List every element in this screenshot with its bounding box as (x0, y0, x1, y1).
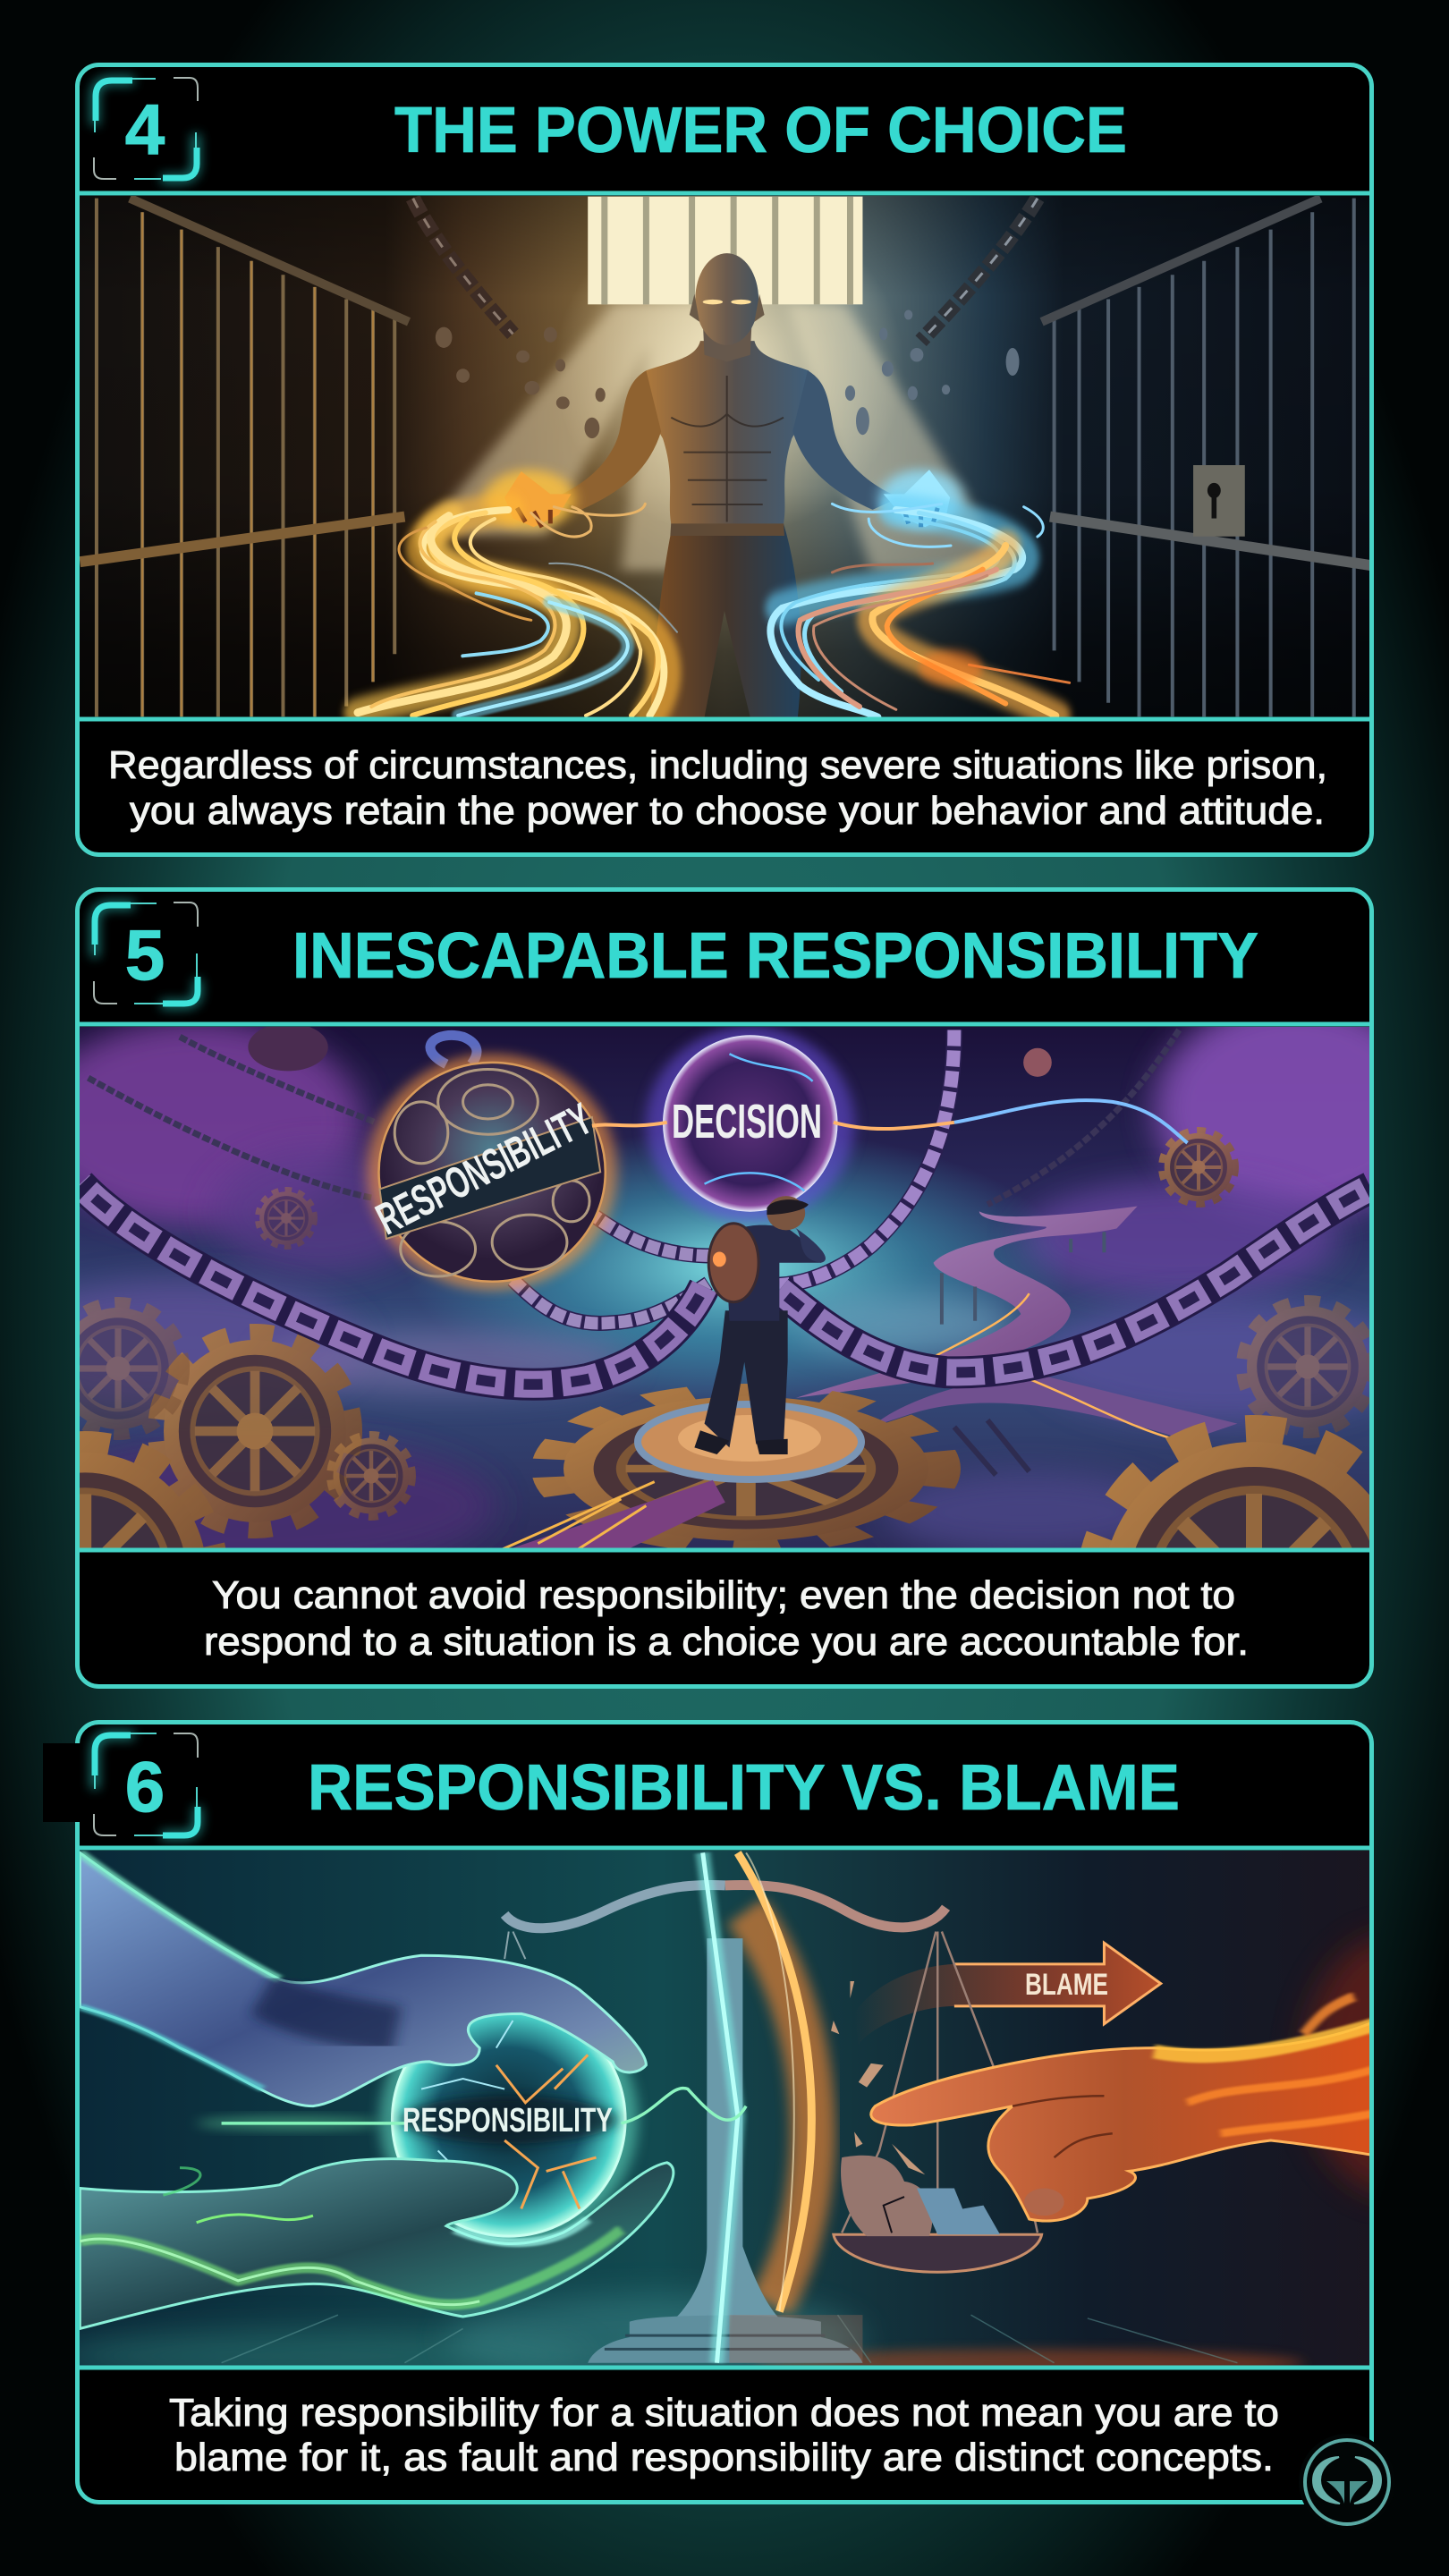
orange arc glow (746, 1911, 813, 2305)
gears (0, 1131, 1411, 1751)
orb label: DECISION (672, 1095, 822, 1148)
body text: you always retain the power to choose your behavior and attitude. (130, 789, 1325, 833)
chains (80, 1030, 1370, 1385)
post and base (675, 1938, 779, 2318)
lock (1193, 465, 1245, 537)
upper hand (80, 1852, 646, 2106)
body text (204, 1573, 1249, 1664)
illustration: hands holding orb against pointing hand (55, 1843, 1449, 2384)
energy arcs (592, 1123, 954, 1129)
arrow label: BLAME (1025, 1968, 1108, 2002)
man (705, 1310, 788, 1447)
divider lines (75, 193, 1374, 719)
broken chain fragments (436, 327, 606, 438)
body text (169, 2391, 1279, 2479)
blame arrow (854, 1943, 1161, 2045)
energy line (222, 2089, 746, 2123)
body text: You cannot avoid responsibility; even the decision not to (212, 1573, 1235, 1617)
figure (650, 523, 801, 717)
beam road (513, 1479, 725, 1547)
number badge 6 (94, 1733, 198, 1835)
body text: blame for it, as fault and responsibility are distinct concepts. (174, 2436, 1274, 2479)
body text: Regardless of circumstances, including severe situations like prison, (108, 743, 1327, 787)
orb (379, 1995, 638, 2245)
body text: respond to a situation is a choice you are accountable for. (204, 1620, 1249, 1664)
orb label: RESPONSIBILITY (402, 2102, 613, 2140)
ball label: RESPONSIBILITY (369, 1093, 600, 1244)
panel: the power of choice (72, 63, 1377, 857)
lower hand (80, 2159, 674, 2328)
number 5: 5 (125, 915, 165, 995)
pointing hand (871, 2021, 1377, 2221)
flames (358, 504, 1070, 717)
panel: responsibility vs blame (43, 1720, 1449, 2504)
body text (108, 743, 1327, 833)
panel border (77, 889, 1372, 1687)
number badge 4 (94, 78, 198, 179)
chains (413, 199, 513, 334)
scale chains and pan (842, 1932, 1038, 2240)
panel border (77, 1723, 1372, 2503)
logo (1299, 2434, 1395, 2530)
panel: inescapable responsibility (75, 887, 1374, 1689)
hands (484, 470, 575, 529)
black rectangle over left edge (43, 1743, 80, 1822)
illustration: man in prison cell with flames (72, 188, 1377, 733)
title: INESCAPABLE RESPONSIBILITY (292, 920, 1258, 992)
number 4: 4 (125, 89, 165, 169)
window (588, 197, 862, 304)
title: THE POWER OF CHOICE (394, 95, 1127, 166)
glowing divide (703, 1852, 738, 2363)
responsibility ball (368, 1054, 617, 1290)
number 6: 6 (125, 1747, 165, 1826)
number badge 5 (94, 902, 198, 1004)
illustration: man chained to responsibility ball and decision orb (80, 1027, 1369, 1547)
panel border (77, 64, 1372, 855)
floor lines (222, 2315, 1237, 2363)
divider lines (75, 1848, 1374, 2368)
title: RESPONSIBILITY VS. BLAME (308, 1752, 1180, 1824)
winding road (796, 1207, 1138, 1398)
scale beam (504, 1885, 725, 1928)
body text: Taking responsibility for a situation does not mean you are to (169, 2391, 1279, 2435)
left and right cell bars (97, 199, 394, 716)
decision orb (646, 1027, 854, 1222)
divider lines (75, 1024, 1374, 1550)
